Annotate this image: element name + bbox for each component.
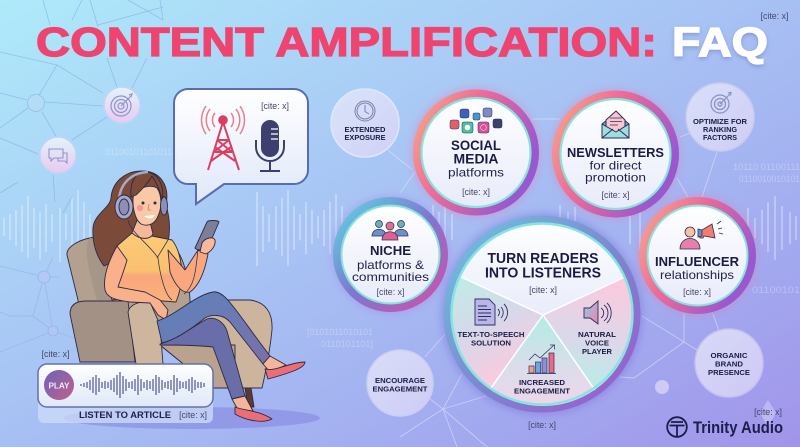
speech bubble with tower and microphone <box>174 89 308 204</box>
icon: chat node <box>40 137 76 173</box>
pie segment: left <box>452 277 543 389</box>
audio player <box>38 364 213 423</box>
panel: turn readers into listeners: PLAYER <box>582 347 613 356</box>
icon: target node <box>104 87 140 123</box>
panel: newsletters: promotion <box>585 170 646 184</box>
binary decoration <box>105 147 800 350</box>
panel: niche platforms: platforms & <box>357 258 424 272</box>
icon: radio tower <box>201 106 245 170</box>
torso <box>110 233 182 302</box>
icon: speaker <box>584 301 611 324</box>
label: LISTEN TO ARTICLE <box>79 410 171 420</box>
armchair <box>67 237 272 407</box>
panel: social media: [cite: x] <box>462 187 490 197</box>
panel: encourage engagement <box>367 350 433 416</box>
title: CONTENT AMPLIFICATION: <box>36 19 657 65</box>
headphones <box>115 172 168 219</box>
panel: social media: SOCIAL <box>451 138 501 153</box>
panel: organic brand presence: ORGANIC <box>710 351 748 360</box>
icon: growth chart <box>527 345 556 374</box>
logo: Trinity Audio: Trinity Audio <box>693 419 783 437</box>
panel: turn readers into listeners: [cite: x] <box>529 285 557 295</box>
panel: newsletters: for direct <box>590 158 642 172</box>
panel: influencer relationships: INFLUENCER <box>655 254 740 269</box>
audio player: [cite: x] <box>179 410 207 420</box>
panel: organic brand presence: PRESENCE <box>708 368 750 377</box>
panel: newsletters: NEWSLETTERS <box>567 145 664 160</box>
right arm <box>168 250 208 292</box>
binary decoration: [0101011010101 <box>307 327 373 338</box>
waveform <box>81 372 204 398</box>
play button <box>44 370 74 400</box>
icon: people <box>372 220 408 240</box>
panel: organic brand presence <box>695 329 763 397</box>
floor shadow <box>64 407 320 429</box>
panel: social media: MEDIA <box>454 152 499 166</box>
citation above player: [cite: x] <box>42 349 69 359</box>
pie segment: top <box>460 225 625 315</box>
hair fringe <box>131 172 163 200</box>
panel: optimize for ranking factors: OPTIMIZE FOR <box>693 119 747 126</box>
citation below main circle: [cite: x] <box>528 420 556 430</box>
panel: turn readers into listeners: NATURAL <box>578 330 616 339</box>
icon: social apps <box>450 108 502 133</box>
icon: target <box>711 92 731 113</box>
hand <box>200 238 215 254</box>
citation top right: [cite: x] <box>761 11 788 21</box>
binary decoration: 01100101 <box>752 285 800 296</box>
binary decoration: 01100101101011 <box>105 147 172 158</box>
panel: social media <box>411 88 541 218</box>
earphone cable <box>128 220 198 300</box>
upper leg <box>157 292 270 364</box>
panel: turn readers into listeners: TURN READERS <box>488 250 598 267</box>
panel: extended exposure: EXTENDED <box>344 125 386 134</box>
illustration: woman in armchair <box>67 171 305 421</box>
upper foot and shoe <box>263 356 286 372</box>
icon: person with megaphone <box>680 221 723 249</box>
icon: document with sound <box>475 299 508 325</box>
panel: niche platforms: NICHE <box>370 243 411 258</box>
sparkle and citation <box>754 400 782 427</box>
phone <box>195 220 219 250</box>
binary decoration: 0110101101] <box>321 339 373 350</box>
pie segment: right <box>543 277 633 390</box>
panel: influencer relationships: relationships <box>660 268 734 282</box>
icon: microphone <box>256 120 284 171</box>
decorative dot <box>655 380 669 394</box>
network lines right <box>388 119 719 447</box>
panel: newsletters <box>550 89 680 219</box>
panel: turn readers into listeners: TEXT-TO-SPEECH <box>458 330 524 339</box>
panel: encourage engagement: ENGAGEMENT <box>372 384 428 394</box>
panel: newsletters: [cite: x] <box>602 190 629 200</box>
sparkle and citation: [cite: x] <box>754 407 782 417</box>
panel: social media: platforms <box>448 166 504 180</box>
panel: turn readers into listeners: INTO LISTENERS <box>485 264 601 282</box>
panel: turn readers into listeners: SOLUTION <box>471 338 511 348</box>
logo: Trinity Audio <box>667 417 783 437</box>
title: FAQ <box>672 19 768 65</box>
pie segment: bottom <box>490 315 595 406</box>
panel: turn readers into listeners <box>441 213 643 415</box>
panel: optimize for ranking factors: FACTORS <box>703 135 737 142</box>
sound wave background <box>4 190 796 266</box>
network lines left <box>0 0 163 352</box>
lower leg <box>160 318 245 399</box>
neck and face <box>132 218 153 238</box>
panel: niche platforms: [cite: x] <box>377 287 404 297</box>
play button: PLAY <box>48 382 70 390</box>
icon: envelope <box>602 111 629 138</box>
binary decoration: 10110 01100111 <box>733 162 800 173</box>
panel: niche platforms <box>332 196 450 314</box>
panel: organic brand presence: BRAND <box>715 360 743 368</box>
panel: encourage engagement: ENCOURAGE <box>375 376 425 385</box>
icon: clock <box>355 101 375 121</box>
ankle and lower shoe <box>232 396 253 411</box>
face details <box>137 202 156 219</box>
panel: turn readers into listeners: INCREASED <box>519 378 566 387</box>
citation: [cite: x] <box>261 101 289 111</box>
panel: influencer relationships <box>638 196 758 316</box>
panel: optimize for ranking factors: RANKING <box>703 127 738 134</box>
panel: influencer relationships: [cite: x] <box>683 287 711 297</box>
panel: optimize for ranking factors <box>686 83 754 151</box>
panel: extended exposure: EXPOSURE <box>344 133 386 142</box>
panel: extended exposure <box>331 89 399 157</box>
panel: turn readers into listeners: ENGAGEMENT <box>514 386 570 396</box>
panel: turn readers into listeners: VOICE <box>585 338 609 348</box>
hair <box>93 171 169 266</box>
left arm <box>105 246 168 320</box>
panel: niche platforms: communities <box>352 270 429 284</box>
